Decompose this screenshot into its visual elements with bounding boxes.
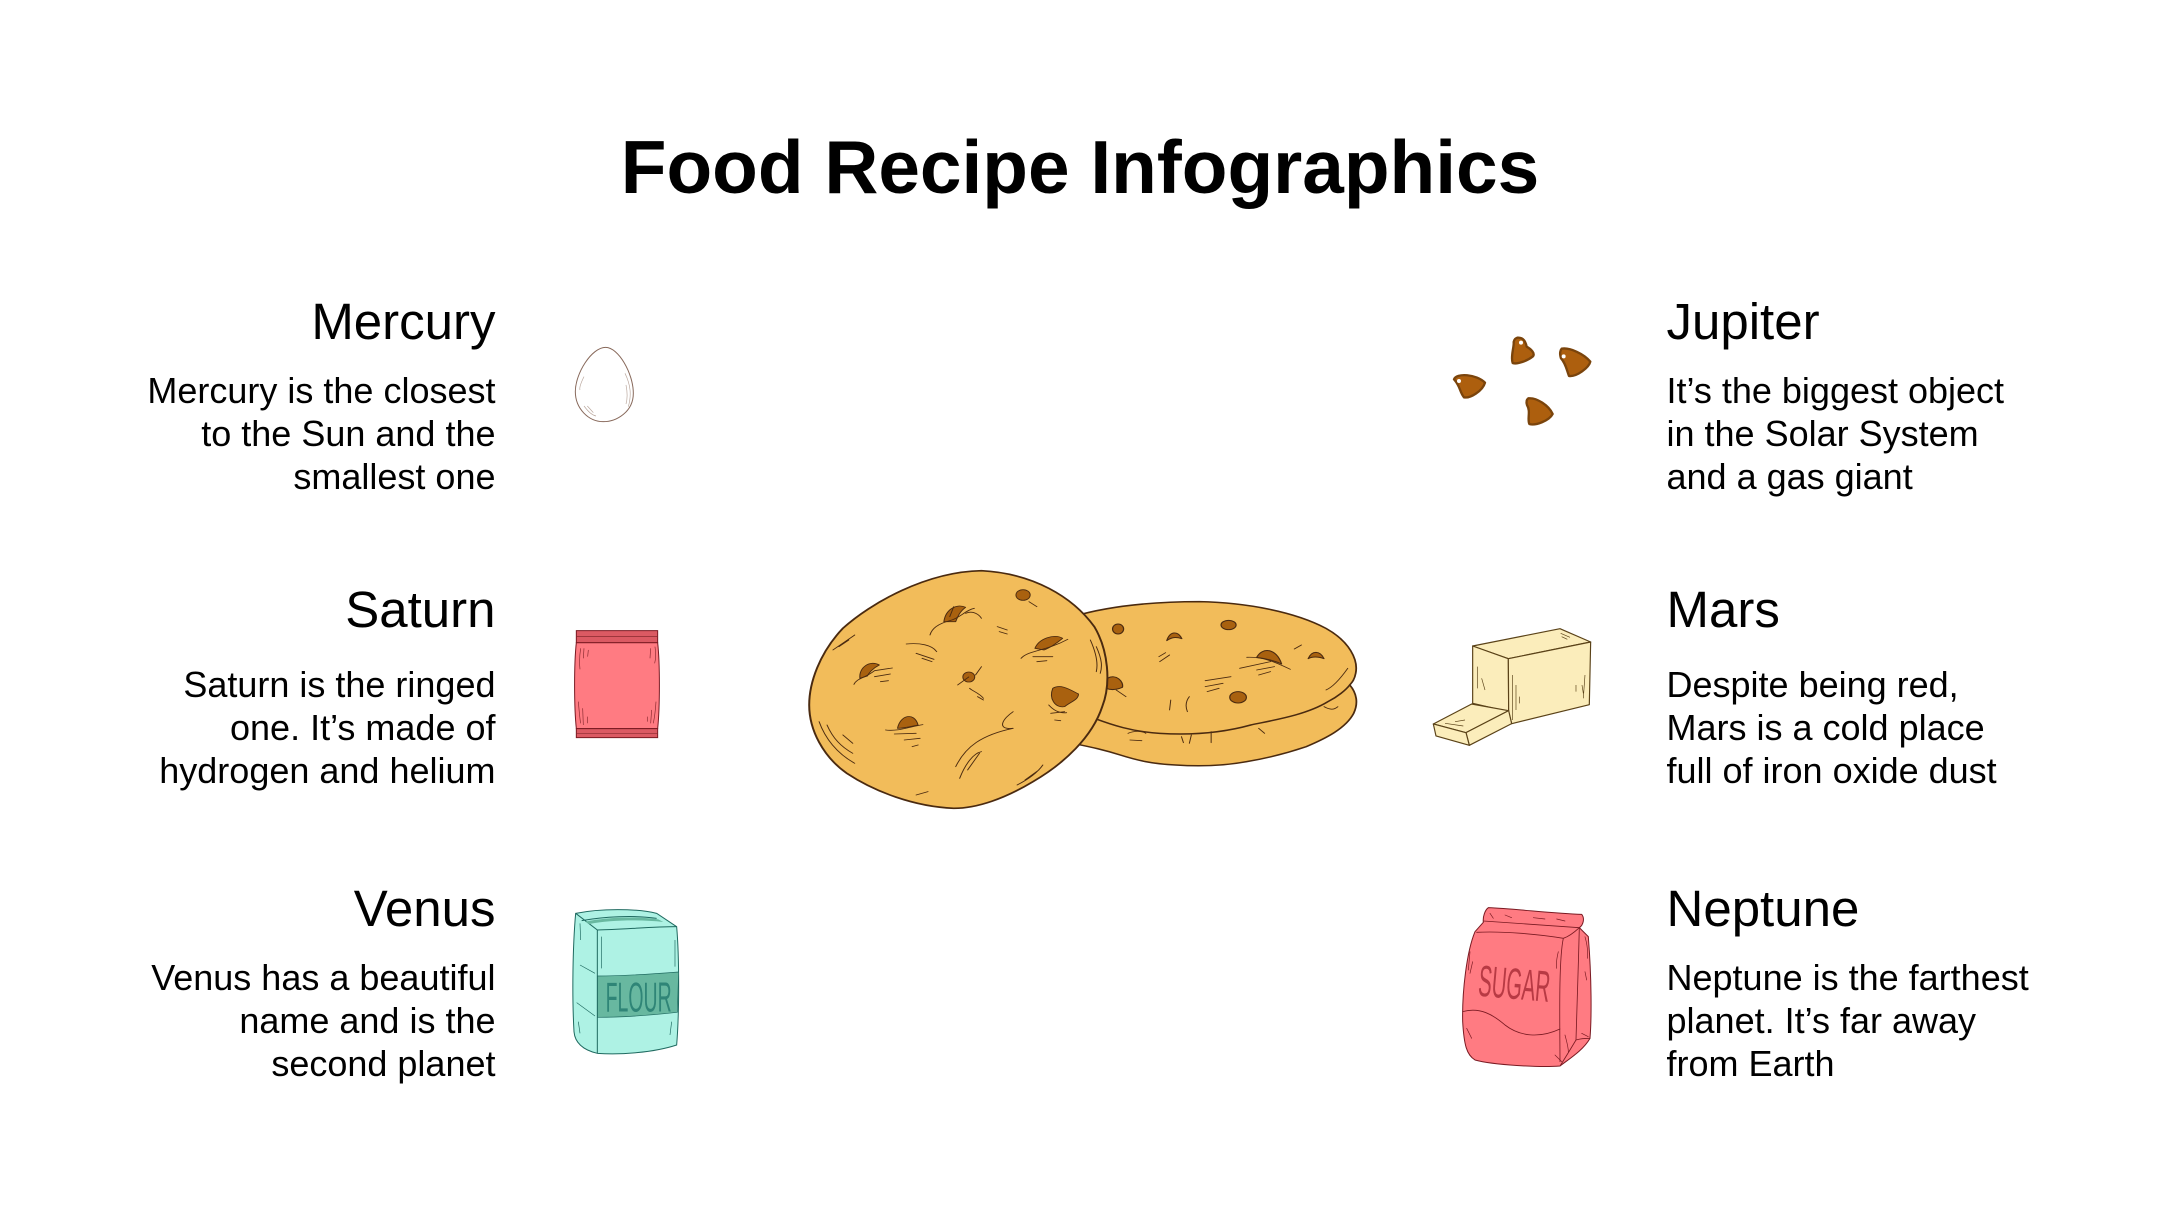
text: Jupiter description [1666,370,2004,497]
heading: Mars: Mars [1666,581,1780,638]
text: Saturn description: one. It’s made of [230,707,496,748]
text: Mercury description: smallest one [293,456,496,497]
text: Jupiter description: and a gas giant [1666,456,1913,497]
heading: Jupiter: Jupiter [1666,293,1820,350]
text: Neptune description: planet. It’s far away [1666,1000,1976,1041]
icon: sugar bag [1463,908,1591,1066]
icon: butter [1433,629,1591,745]
text: Mars description: full of iron oxide dust [1666,750,1997,791]
text: Mercury description: Mercury is the closest [147,370,496,410]
icon: flour bag: FLOUR [606,974,672,1020]
text: Mars description: Despite being red, [1666,664,1959,704]
text: Jupiter description: It’s the biggest object [1666,370,2004,410]
text: Jupiter description: in the Solar System [1666,413,1979,454]
icon: flour bag [573,910,679,1054]
text: Mercury description [147,370,496,497]
icon: red package [575,631,659,738]
text: Venus description: Venus has a beautiful [151,957,496,998]
title: Food Recipe Infographics [621,125,1539,209]
back cookie [1073,602,1356,766]
text: Neptune description: Neptune is the farthest [1666,957,2029,998]
text: Neptune description [1666,957,2029,1084]
text: Venus description: name and is the [239,1000,496,1041]
heading: Mercury: Mercury [311,293,496,350]
text: Saturn description: hydrogen and helium [159,750,496,791]
icon: egg [575,347,633,422]
heading: Venus: Venus [354,880,496,937]
heading: Saturn: Saturn [345,581,496,638]
text: Saturn description [159,664,496,791]
icon: sugar bag: SUGAR [1476,957,1552,1012]
heading: Neptune: Neptune [1666,880,1859,937]
text: Mercury description: to the Sun and the [201,413,496,454]
text: Venus description: second planet [271,1043,496,1084]
front cookie [809,571,1107,808]
icon: cookies [809,571,1356,808]
text: Mars description [1666,664,1997,791]
text: Mars description: Mars is a cold place [1666,707,1985,748]
text: Venus description [151,957,496,1084]
text: Neptune description: from Earth [1666,1043,1835,1084]
text: Saturn description: Saturn is the ringed [183,664,496,704]
icon: chocolate chips [1454,338,1590,424]
